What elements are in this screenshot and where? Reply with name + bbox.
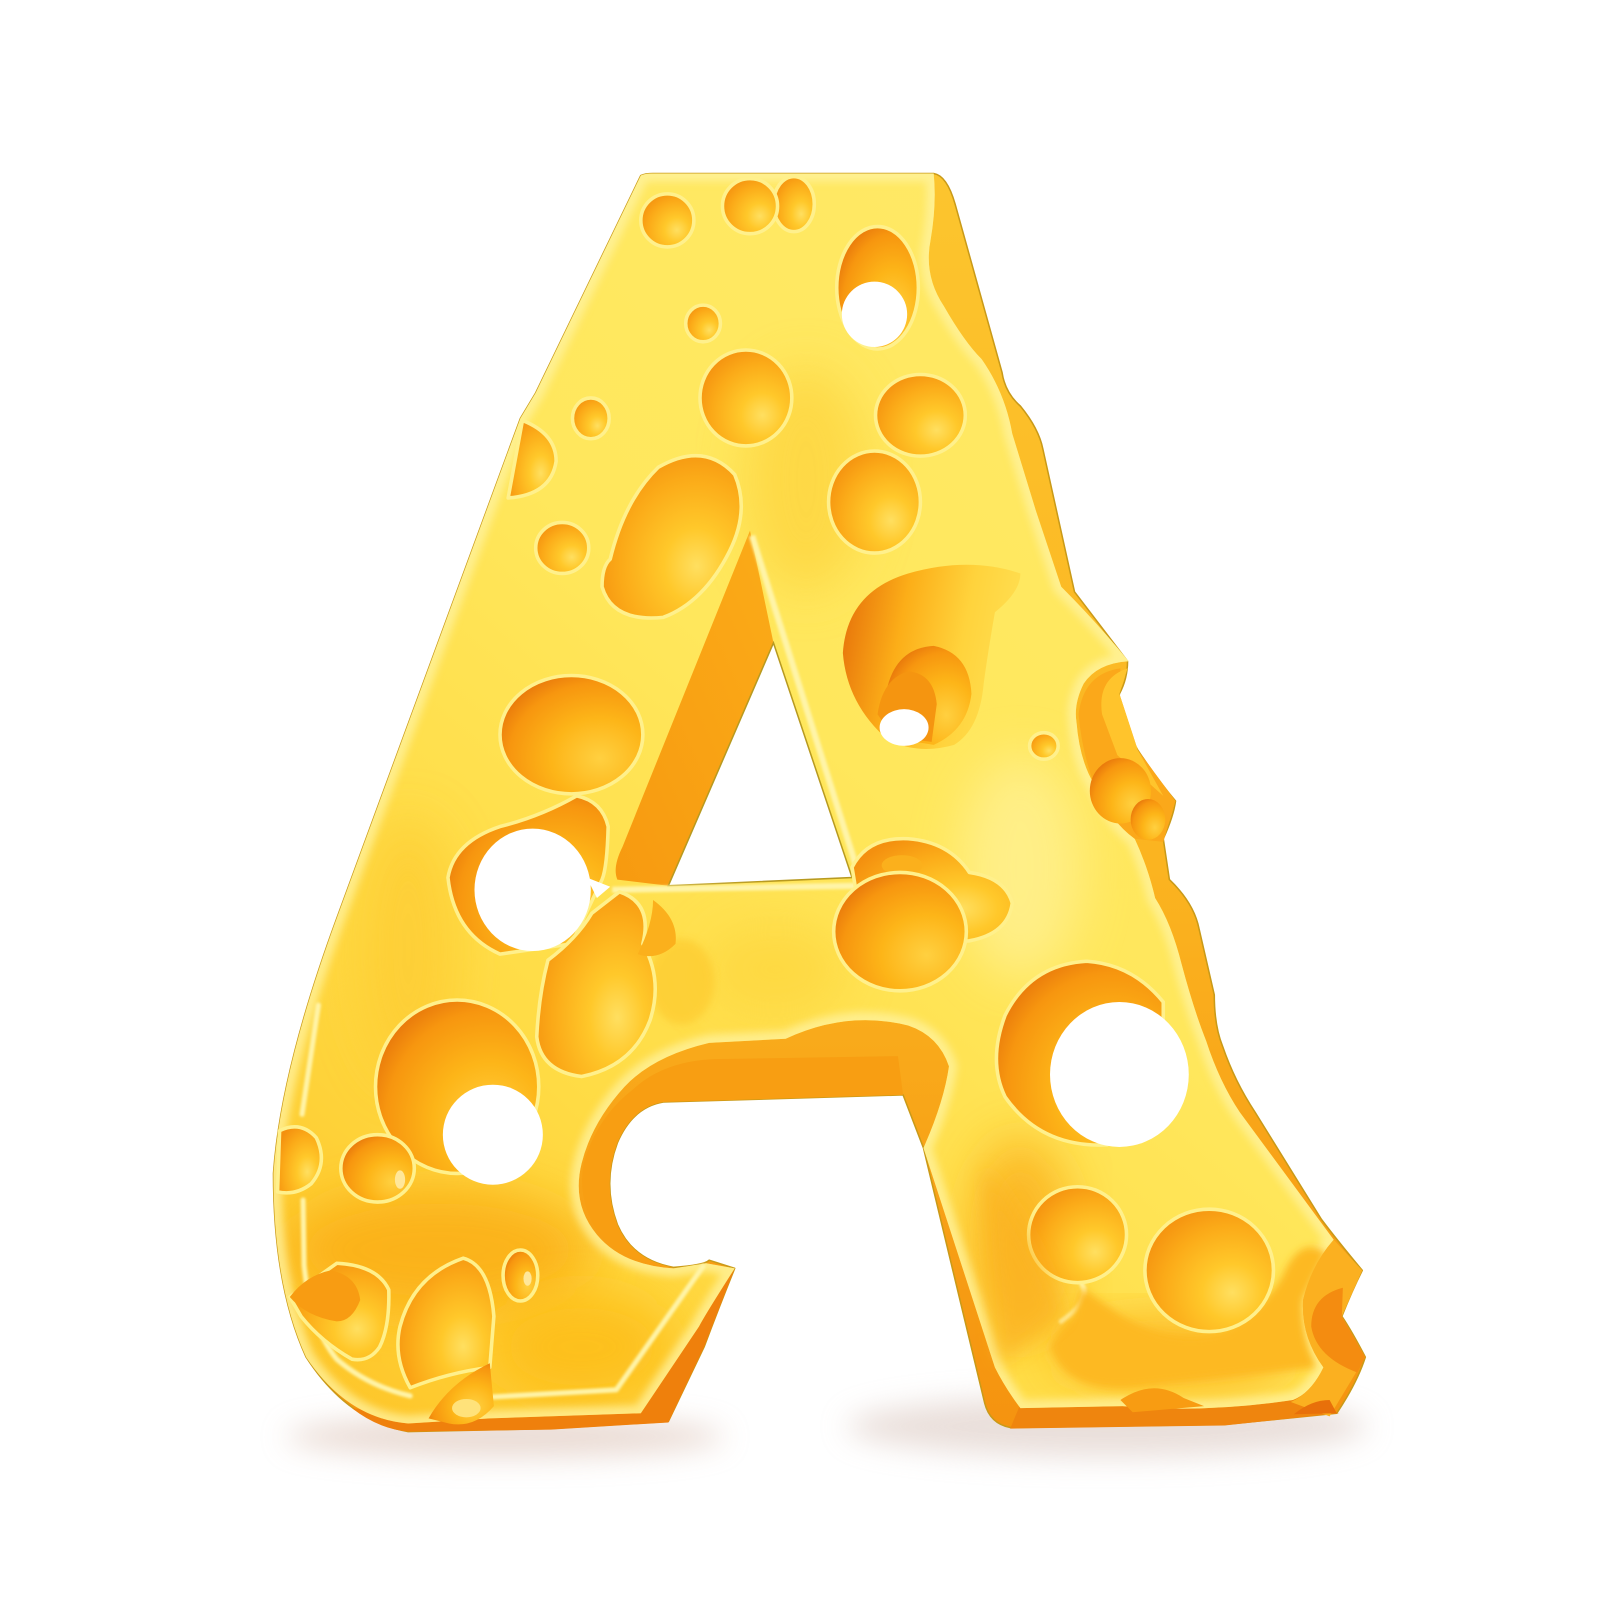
dimple cluster centre [834,839,1012,991]
illustration: cheese letter A [272,172,1366,1470]
bite on right edge [1079,668,1176,842]
small lobe beside pear [638,900,676,956]
orange dimple left middle [500,676,643,794]
cheese front face [273,173,1334,1423]
through-hole top right [837,227,918,349]
cheese side extrusion [273,173,1365,1432]
big through-hole lower right [996,961,1189,1147]
lumpy pear dimple [537,892,655,1077]
small dimples, top [508,177,1058,759]
faint dimple by crossbar [649,939,714,1024]
ground shadow left [286,1416,724,1457]
bottom base band left [352,1268,735,1432]
dimples lower left [278,1127,538,1424]
big through-hole lower left [376,1000,543,1185]
triangular counter: face edge highlight [612,536,862,890]
bottom base band right [1010,1394,1339,1429]
face highlights [302,1005,1084,1397]
face light and shade patches [273,173,1334,1423]
chipped corner bottom right [1291,1240,1365,1416]
deep hole upper right [843,565,1020,749]
large dimples upper left [602,456,741,618]
triangular counter: inner side wall [616,531,773,886]
ground shadow right [847,1396,1367,1457]
dimples lower right [983,1166,1327,1412]
triangular counter: white opening [668,643,852,886]
through-hole left [448,796,610,954]
arch upper wall shading [582,1056,903,1267]
